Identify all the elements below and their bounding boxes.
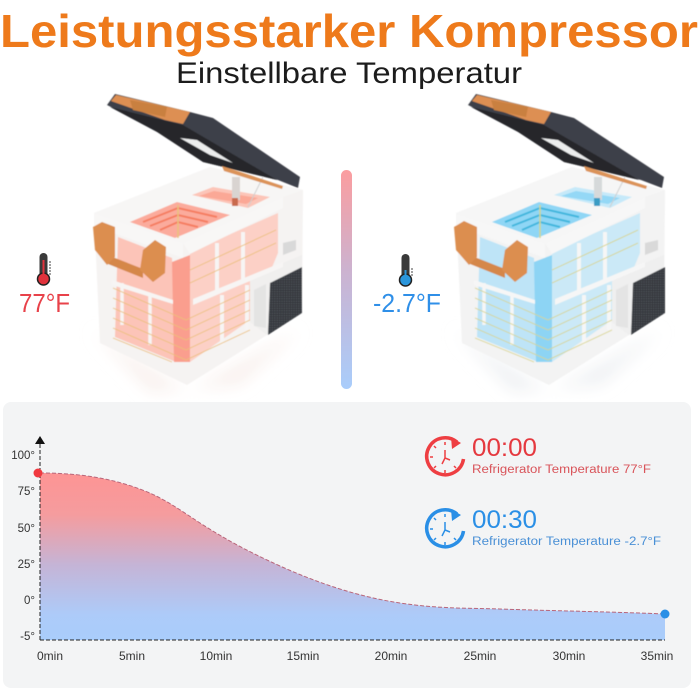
- axes: [40, 442, 665, 640]
- label: refrigerator temperature -2.7°F: Refrigerator Temperature -2.7°F: [472, 536, 661, 548]
- label: 00:00: 00:00: [472, 434, 537, 462]
- end point: [660, 610, 670, 618]
- area curve: [40, 473, 665, 640]
- x axis labels: 35min: [641, 649, 673, 663]
- panel: temperature chart: [3, 402, 691, 688]
- temperature: 77°F: 77°F: [19, 288, 70, 318]
- icon: blue clock: [427, 509, 464, 547]
- fridge: warm: [92, 94, 303, 392]
- start point: [34, 468, 42, 478]
- gradient bar: [341, 170, 352, 389]
- y axis labels: 50°: [18, 523, 35, 535]
- y axis labels: 75°: [18, 486, 35, 498]
- icon: red clock: [427, 437, 464, 475]
- y axis labels: [11, 450, 35, 643]
- x axis labels: 15min: [287, 649, 319, 663]
- y axis labels: 100°: [11, 450, 35, 462]
- thermometer: cold: [400, 254, 413, 286]
- subtitle: Einstellbare Temperatur: [176, 57, 522, 90]
- temperature: -2.7°F: -2.7°F: [373, 288, 441, 318]
- y axis labels: 25°: [18, 559, 35, 571]
- axis arrow: [35, 436, 45, 444]
- x axis labels: 10min: [200, 649, 232, 663]
- title: Leistungsstarker Kompressor: [0, 5, 698, 57]
- label: refrigerator temperature 77°F: Refrigerator Temperature 77°F: [472, 464, 651, 476]
- x axis labels: 30min: [553, 649, 585, 663]
- x axis labels: 5min: [119, 649, 145, 663]
- x axis labels: [37, 649, 673, 663]
- y axis labels: -5°: [20, 631, 35, 643]
- fridge: cold: [454, 94, 665, 392]
- thermometer: warm: [38, 253, 51, 285]
- curve line: [40, 473, 665, 614]
- x axis labels: 0min: [37, 649, 63, 663]
- x axis labels: 25min: [464, 649, 496, 663]
- y axis labels: 0°: [24, 595, 35, 607]
- x axis labels: 20min: [375, 649, 407, 663]
- label: 00:30: 00:30: [472, 506, 537, 534]
